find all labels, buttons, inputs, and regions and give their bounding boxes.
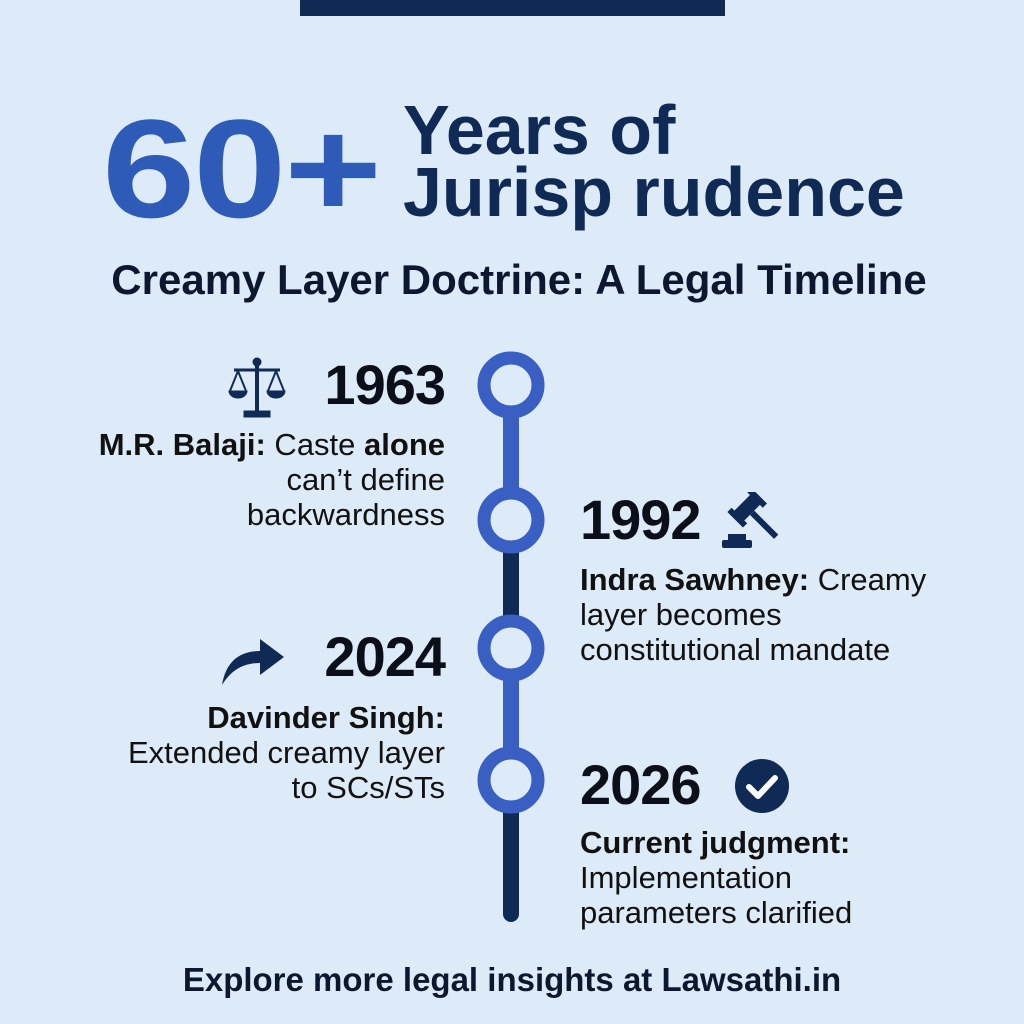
event 1992: [580, 488, 926, 667]
event 2024: to SCs/STs: [292, 770, 445, 805]
event 2026: Implementation: [580, 860, 792, 895]
event 1992: layer becomes: [580, 597, 782, 632]
event 1963: can’t define: [286, 462, 445, 497]
icon: arrow: [222, 639, 284, 685]
icon: check: [735, 759, 789, 813]
subtitle: Creamy Layer Doctrine: A Legal Timeline: [111, 256, 927, 303]
event 1963: M.R. Balaji: Caste alone: [99, 427, 445, 462]
event 2024: 2024: [324, 625, 445, 688]
event 2024: Davinder Singh:: [207, 700, 445, 735]
event 1992: 1992: [580, 488, 701, 551]
title text: Years of: [403, 91, 675, 169]
icon: scales: [228, 358, 286, 418]
event 2026: parameters clarified: [580, 895, 852, 930]
event 1963: [99, 353, 445, 532]
event 1992: constitutional mandate: [580, 632, 890, 667]
title text: Jurisp rudence: [403, 153, 905, 231]
title: [102, 90, 905, 247]
event 2024: Extended creamy layer: [128, 735, 445, 770]
event 1992: Indra Sawhney: Creamy: [580, 562, 926, 597]
event 1963: backwardness: [247, 497, 445, 532]
event 2026: [580, 753, 852, 930]
big number: 60+: [102, 90, 380, 247]
top bar: [300, 0, 725, 16]
event 2026: Current judgment:: [580, 825, 850, 860]
icon: gavel: [722, 492, 778, 548]
footer: Explore more legal insights at Lawsathi.in: [183, 961, 841, 998]
title text: [403, 91, 905, 231]
event 1963: 1963: [324, 353, 445, 416]
event 2026: 2026: [580, 753, 701, 816]
event 2024: [128, 625, 446, 805]
